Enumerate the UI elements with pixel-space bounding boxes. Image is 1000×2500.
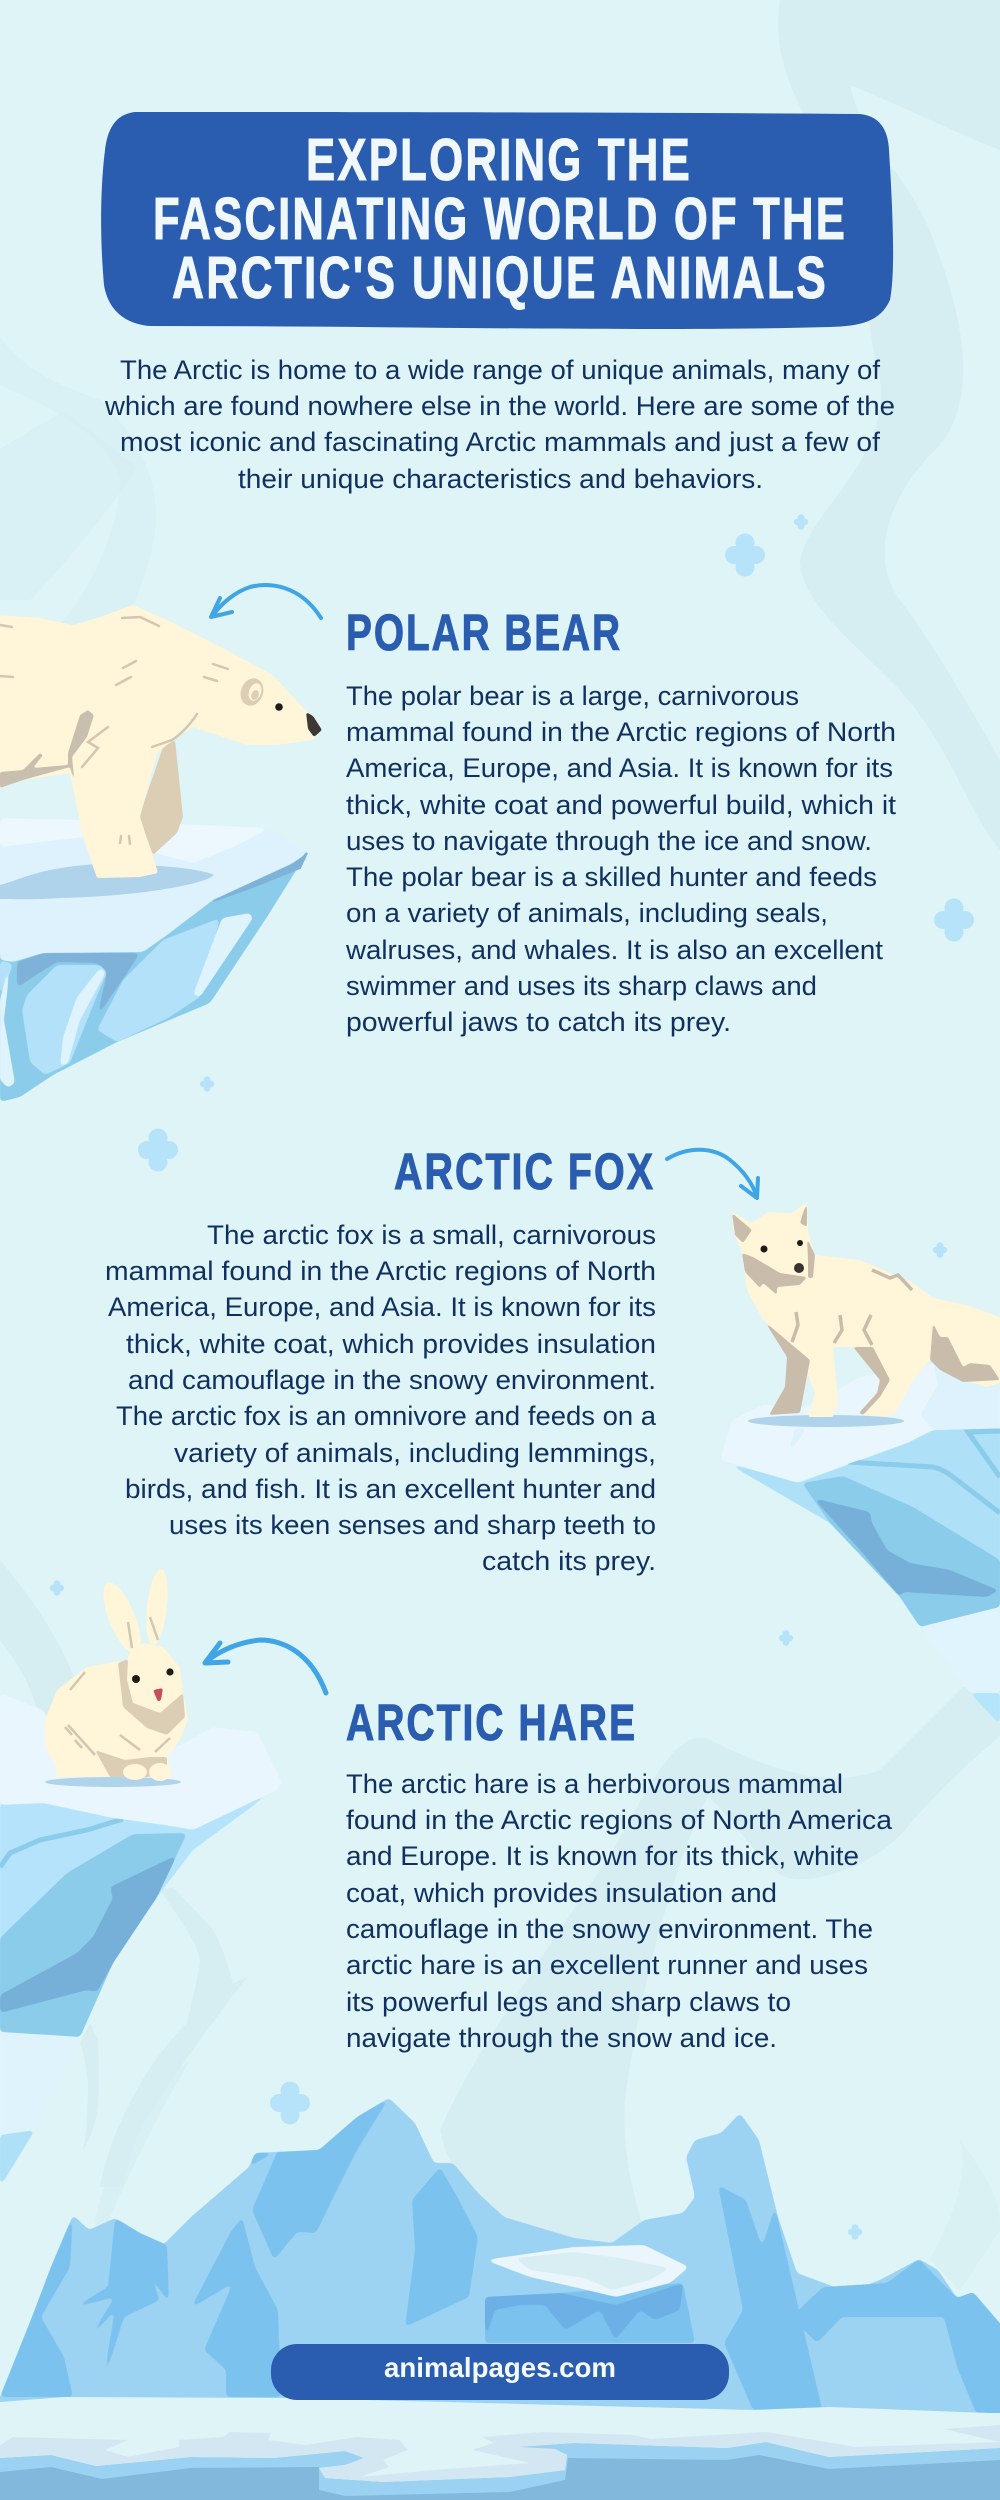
- illustration: ice floe under polar bear: [0, 818, 307, 1102]
- arctic hare description: its powerful legs and sharp claws to: [346, 1987, 791, 2017]
- arctic hare description: camouflage in the snowy environment. The: [346, 1914, 873, 1944]
- intro paragraph: most iconic and fascinating Arctic mammals and just a few of: [120, 427, 881, 457]
- arctic hare description: The arctic hare is a herbivorous mammal: [346, 1769, 843, 1799]
- polar bear description: on a variety of animals, including seals,: [346, 898, 828, 928]
- arctic fox description: birds, and fish. It is an excellent hunter and: [125, 1474, 656, 1504]
- arctic fox description: and camouflage in the snowy environment.: [128, 1365, 656, 1395]
- arctic fox description: thick, white coat, which provides insulation: [126, 1329, 656, 1359]
- arctic hare description: arctic hare is an excellent runner and uses: [346, 1950, 868, 1980]
- polar bear description: swimmer and uses its sharp claws and: [346, 971, 817, 1001]
- polar bear description: [345, 681, 897, 1037]
- intro paragraph: their unique characteristics and behaviors.: [238, 464, 763, 494]
- illustration: ice mountains: [0, 2098, 1000, 2430]
- arctic fox description: uses its keen senses and sharp teeth to: [169, 1510, 656, 1540]
- arctic hare description: and Europe. It is known for its thick, white: [346, 1841, 859, 1871]
- arctic hare description: [346, 1769, 893, 2053]
- polar bear description: uses to navigate through the ice and snow.: [346, 826, 872, 856]
- illustration: ice cliff under arctic hare: [0, 1693, 282, 2187]
- polar bear description: powerful jaws to catch its prey.: [346, 1007, 731, 1037]
- polar bear heading: POLAR BEAR: [346, 604, 622, 661]
- arctic hare description: found in the Arctic regions of North America: [346, 1805, 893, 1835]
- arctic fox description: America, Europe, and Asia. It is known for its: [108, 1292, 656, 1322]
- arrow to arctic hare: [205, 1640, 326, 1693]
- arctic fox description: The arctic fox is an omnivore and feeds on a: [116, 1401, 657, 1431]
- arctic fox description: mammal found in the Arctic regions of North: [105, 1256, 656, 1286]
- polar bear description: thick, white coat and powerful build, which it: [346, 790, 897, 820]
- polar bear description: mammal found in the Arctic regions of North: [346, 717, 896, 747]
- arctic hare heading: ARCTIC HARE: [346, 1694, 637, 1751]
- website text: animalpages.com: [384, 2352, 616, 2383]
- arctic fox description: [105, 1220, 657, 1576]
- title banner: [101, 112, 893, 329]
- arrow to polar bear: [211, 585, 321, 618]
- arctic fox description: variety of animals, including lemmings,: [174, 1438, 656, 1468]
- polar bear description: America, Europe, and Asia. It is known for its: [346, 753, 893, 783]
- intro paragraph: which are found nowhere else in the world. Here are some of the: [104, 391, 895, 421]
- arctic hare description: coat, which provides insulation and: [346, 1878, 777, 1908]
- arctic fox description: The arctic fox is a small, carnivorous: [207, 1220, 656, 1250]
- title text: [153, 127, 847, 311]
- website link pill: [271, 2344, 729, 2400]
- illustration: arctic hare: [45, 1568, 188, 1787]
- clover decorations: [50, 514, 974, 2240]
- intro paragraph: [104, 355, 895, 494]
- title text: EXPLORING THE: [306, 127, 692, 193]
- illustration: snowy ground and water: [0, 2397, 1000, 2500]
- illustration: polar bear: [0, 605, 322, 899]
- arctic fox heading: ARCTIC FOX: [394, 1143, 655, 1200]
- arctic fox description: catch its prey.: [482, 1546, 656, 1576]
- polar bear description: walruses, and whales. It is also an excellent: [345, 935, 884, 965]
- polar bear description: The polar bear is a large, carnivorous: [346, 681, 799, 711]
- polar bear description: The polar bear is a skilled hunter and feeds: [346, 862, 877, 892]
- illustration: arctic fox: [732, 1202, 1000, 1427]
- intro paragraph: The Arctic is home to a wide range of unique animals, many of: [120, 355, 881, 385]
- arctic hare description: navigate through the snow and ice.: [346, 2023, 777, 2053]
- illustration: ice cliff under arctic fox: [720, 1363, 1000, 1725]
- arrow to arctic fox: [667, 1150, 758, 1198]
